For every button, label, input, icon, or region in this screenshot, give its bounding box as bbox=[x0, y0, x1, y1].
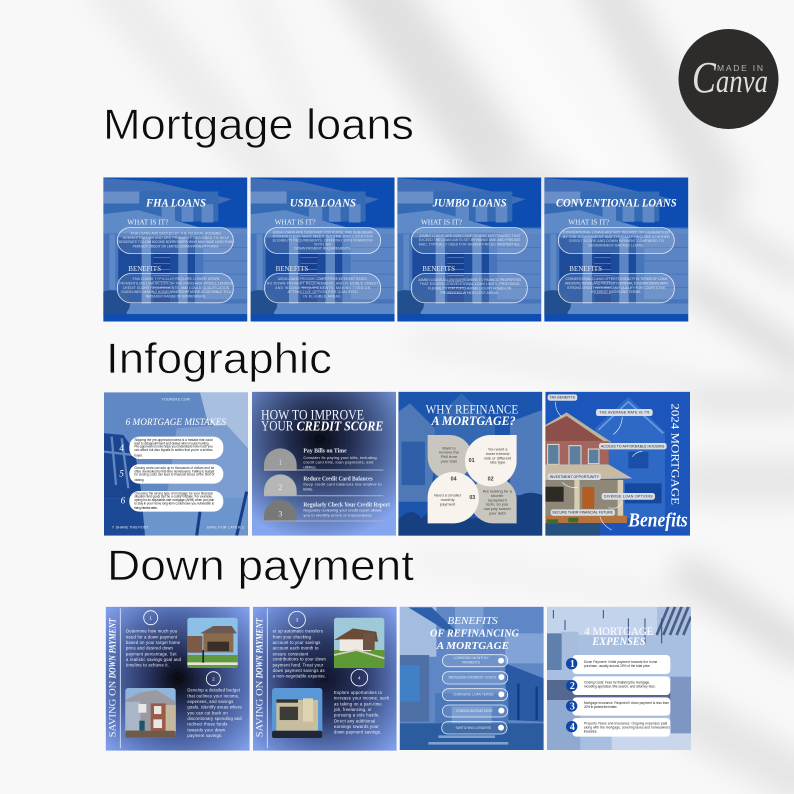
panel: FHA loans: FHA LOANS TYPICALLY REQUIRE LOWER DOWN bbox=[133, 277, 220, 281]
panel: benefits of refinancing a mortgage: REDUCING INTEREST COSTS bbox=[449, 676, 497, 680]
panel: why refinance a mortgage: remove the bbox=[439, 450, 460, 455]
panel: 6 mortgage mistakes: to stay in your home long-term could leave you vulnerable to bbox=[134, 501, 215, 505]
heading: Mortgage loans: Mortgage loans bbox=[103, 101, 414, 149]
panel: 6 mortgage mistakes: 6 bbox=[121, 496, 126, 506]
panel: how to improve your credit score: YOUR bbox=[261, 419, 294, 435]
panel: why refinance a mortgage: your loan bbox=[441, 458, 457, 463]
panel: Jumbo loans: FLEXIBILITY FOR PURCHASING LUXURY HOMES OR bbox=[428, 286, 512, 290]
panel: 6 mortgage mistakes: closing. bbox=[134, 478, 144, 482]
panel: saving on down payment steps 1-2: payment percentage. Set bbox=[126, 651, 177, 656]
panel: 2024 mortgage benefits: DIVERSE LOAN OPTIONS bbox=[604, 495, 653, 499]
panel: Jumbo loans: WHAT IS IT? bbox=[421, 218, 462, 226]
panel: saving on down payment steps 3-4: payment fund. Treat your bbox=[273, 662, 324, 667]
panel: 4 mortgage expenses bbox=[547, 606, 691, 750]
panel: Conventional loans: GOVERNMENT BACKED LOANS. bbox=[588, 244, 645, 248]
panel: how to improve your credit score: limits. bbox=[303, 487, 313, 492]
panel: why refinance a mortgage: PMI from bbox=[441, 454, 458, 459]
panel: Jumbo loans: MAC, TYPICALLY USED FOR HIGHER PRICED PROPERTIES. bbox=[419, 242, 520, 246]
panel: 6 mortgage mistakes: Closing costs can add up to thousands of dollars and be bbox=[134, 466, 215, 470]
panel: saving on down payment steps 3-4: contributions to your down bbox=[273, 657, 326, 662]
panel: 2024 mortgage benefits: SECURE THEIR FINANCIAL FUTURE bbox=[552, 511, 614, 515]
panel: 2024 mortgage benefits: ACCESS TO AFFORDABLE HOUSING bbox=[601, 444, 665, 448]
panel: benefits of refinancing a mortgage bbox=[400, 606, 544, 750]
panel: FHA loans: MODERATE TO LOW INCOME BORROWERS WHO MAY HAVE LESS THAN bbox=[118, 240, 234, 244]
panel: 2024 mortgage benefits: 2024 MORTGAGE bbox=[669, 403, 682, 505]
panel: saving on down payment steps 1-2: need for a down payment bbox=[126, 634, 178, 639]
panel: benefits of refinancing a mortgage: OF REFINANCING bbox=[430, 629, 519, 640]
panel: 4 mortgage expenses: Down Payment: Initial payment towards the home bbox=[584, 660, 658, 664]
panel: Jumbo loans: BENEFITS bbox=[422, 265, 455, 273]
panel: Jumbo loans: JUMBO LOANS ALLOW BORROWERS TO FINANCE PROPERTIES bbox=[418, 278, 522, 282]
panel: how to improve your credit score: CREDIT SCORE bbox=[297, 420, 383, 435]
panel: how to improve your credit score: 3 bbox=[278, 509, 282, 518]
panel: 6 mortgage mistakes: Pre-approval not only helps you understand how much you bbox=[134, 445, 213, 449]
panel: saving on down payment steps 1-2: expenses, and savings bbox=[187, 699, 234, 704]
panel: 4 mortgage expenses: including appraisal, title search, and attorney fees. bbox=[584, 684, 656, 688]
panel: USDA loans: AND INCOME REQUIREMENTS, MAKING THEM AN bbox=[275, 286, 371, 290]
panel: why refinance a mortgage: your debt bbox=[489, 510, 507, 515]
panel: Conventional loans: CONVENTIONAL LOANS OFFER FLEXIBILITY IN TERMS OF LOAN bbox=[565, 277, 668, 281]
panel: Conventional loans: INTEREST RATES AND TERMS. bbox=[591, 290, 641, 294]
panel: 6 mortgage mistakes: for closing costs can lead to financial stress at the time of bbox=[134, 473, 214, 477]
panel: Jumbo loans: JUMBO LOANS ARE NON-CONFORMING MORTGAGES THAT bbox=[419, 234, 521, 238]
panel: saving on down payment steps 1-2: that outlines your income, bbox=[187, 693, 240, 698]
panel: saving on down payment steps 1-2: payment savings. bbox=[187, 733, 223, 738]
panel: USDA loans: NO DOWN PAYMENT REQUIREMENT, AND FLEXIBLE CREDIT bbox=[267, 282, 379, 286]
panel: saving on down payment steps 1-2: timeline to achieve it. bbox=[126, 663, 169, 668]
panel: Conventional loans: CONVENTIONAL LOANS ARE NOT INSURED OR GUARANTEED bbox=[563, 230, 670, 234]
panel: why refinance a mortgage: Need a smaller bbox=[434, 493, 462, 498]
panel: how to improve your credit score: Pay Bills on Time bbox=[303, 448, 347, 454]
panel: why refinance a mortgage bbox=[398, 392, 542, 536]
panel: saving on down payment steps 3-4: Direct any additional bbox=[334, 718, 376, 723]
panel: saving on down payment steps 1-2: you can cut back on bbox=[187, 710, 228, 715]
panel: Conventional loans bbox=[544, 178, 688, 322]
panel: Jumbo loans: EXCEED THE LOAN LIMITS SET BY FANNIE MAE AND FREDDIE bbox=[419, 238, 521, 242]
panel: FHA loans: ADMINISTRATION AND ARE PRIMARILY DESIGNED TO HELP bbox=[123, 236, 230, 240]
panel: why refinance a mortgage: A MORTGAGE? bbox=[431, 414, 516, 428]
panel: FHA loans: GUIDELINES, MAKING HOMEOWNERSHIP MORE ACCESSIBLE TO A bbox=[121, 290, 232, 294]
panel: how to improve your credit score bbox=[252, 392, 396, 536]
panel: 4 mortgage expenses: 20% to protect the lender. bbox=[584, 705, 617, 709]
panel: saving on down payment steps 3-4: account to your savings bbox=[273, 640, 321, 645]
panel: 4 mortgage expenses: 2 bbox=[570, 681, 575, 692]
badge: Made in Canva: MADE IN bbox=[717, 63, 763, 73]
panel: FHA loans: BROADER RANGE OF BORROWERS. bbox=[146, 294, 206, 298]
panel: USDA loans: USDA LOANS PROVIDE COMPETITIVE INTEREST RATES, bbox=[278, 277, 368, 281]
panel: why refinance a mortgage: 01 bbox=[469, 458, 475, 464]
panel: 6 mortgage mistakes: Skipping the pre-approval process is a mistake that could bbox=[134, 438, 213, 442]
panel: benefits of refinancing a mortgage: PAYMENTS bbox=[462, 661, 481, 665]
panel: why refinance a mortgage: rate or different bbox=[484, 455, 512, 460]
panel: benefits of refinancing a mortgage: A MORTGAGE bbox=[436, 641, 509, 652]
panel: USDA loans: IN ELIGIBLE AREAS. bbox=[303, 294, 342, 298]
panel: 2024 mortgage benefits: THE AVERAGE RATE IS 7% bbox=[599, 411, 649, 415]
panel: why refinance a mortgage: You want a bbox=[488, 447, 508, 452]
badge: Made in Canva bbox=[678, 29, 778, 129]
panel: 6 mortgage mistakes: 5 bbox=[119, 469, 124, 479]
panel: FHA loans: PERFECT CREDIT OR LIMITED DOWN PAYMENT FUNDS. bbox=[133, 244, 219, 248]
panel: USDA loans: WHAT IS IT? bbox=[275, 218, 316, 226]
panel: saving on down payment steps 3-4: Explore opportunities to bbox=[334, 690, 383, 695]
panel: saving on down payment steps 3-4: as taking on a part-time bbox=[334, 701, 382, 706]
panel: saving on down payment steps 3-4: et up automatic transfers bbox=[273, 629, 323, 634]
panel: why refinance a mortgage: shorter bbox=[491, 493, 504, 498]
panel: saving on down payment steps 1-2: 2 bbox=[212, 676, 215, 681]
panel: 6 mortgage mistakes: rising interest rates. bbox=[134, 506, 158, 510]
panel: saving on down payment steps 3-4: down payment savings. bbox=[334, 730, 381, 735]
panel: how to improve your credit score: Reduce Credit Card Balances bbox=[303, 477, 373, 483]
panel: how to improve your credit score: utilities. bbox=[303, 464, 317, 469]
panel: 6 mortgage mistakes: YOURSITE.COM bbox=[162, 397, 190, 401]
heading: Infographic: Infographic bbox=[106, 335, 332, 383]
panel: why refinance a mortgage: Are looking for a bbox=[483, 489, 513, 494]
panel: 4 mortgage expenses: Mortgage Insurance: Required if down payment is less than bbox=[584, 701, 669, 705]
panel: saving on down payment steps 3-4: increase your income, such bbox=[334, 696, 390, 701]
panel: saving on down payment steps 3-4: earnings towards your bbox=[334, 724, 379, 729]
panel: saving on down payment steps 1-2: based on your target home bbox=[126, 640, 181, 645]
panel: FHA loans: FHA LOANS ARE BACKED BY THE FEDERAL HOUSING bbox=[131, 232, 221, 236]
panel: Conventional loans: BENEFITS bbox=[569, 265, 602, 273]
panel: why refinance a mortgage: 03 bbox=[469, 495, 475, 501]
heading: Down payment: Down payment bbox=[107, 542, 414, 590]
panel: 6 mortgage mistakes: lead to disappointment and delays when house hunting. bbox=[134, 441, 209, 445]
panel: 6 mortgage mistakes bbox=[104, 392, 248, 536]
panel: 6 mortgage mistakes: 4 bbox=[119, 443, 124, 453]
panel: saving on down payment steps 3-4: SAVING ON bbox=[255, 680, 265, 737]
panel: saving on down payment steps 1-2: Determine how much you bbox=[126, 629, 178, 634]
panel: FHA loans: FHA LOANS bbox=[145, 198, 206, 210]
panel: USDA loans bbox=[250, 178, 395, 322]
panel: 2024 mortgage benefits: TAX BENEFITS bbox=[550, 396, 576, 400]
panel: why refinance a mortgage: payment bbox=[440, 501, 456, 506]
panel: saving on down payment steps 3-4: from your checking bbox=[273, 634, 312, 639]
panel: why refinance a mortgage: Want to bbox=[442, 445, 457, 450]
panel: 4 mortgage expenses: 3 bbox=[570, 701, 575, 712]
panel: why refinance a mortgage: can pay sooner bbox=[484, 506, 512, 511]
panel: 4 mortgage expenses: EXPENSES bbox=[591, 636, 646, 648]
panel: 6 mortgage mistakes: can afford but also signals to sellers that you're a serious bbox=[134, 448, 213, 452]
panel: saving on down payment steps 1-2: towards your down bbox=[187, 727, 226, 732]
panel: saving on down payment steps 3-4: account each month to bbox=[273, 646, 319, 651]
panel: saving on down payment steps 1-2: a realistic savings goal and bbox=[126, 657, 182, 662]
panel: Jumbo loans bbox=[397, 178, 542, 322]
panel: USDA loans: HOMEBUYERS WHO MEET INCOME AND LOCATION bbox=[273, 234, 373, 238]
panel: saving on down payment steps 3-4: job, freelancing, or bbox=[333, 707, 372, 712]
panel: Conventional loans: WHAT IS IT? bbox=[568, 218, 609, 226]
panel: saving on down payment steps 3-4: 3 bbox=[296, 617, 299, 622]
panel: Conventional loans: STRONG CREDIT HISTORIES MAY QUALIFY FOR COMPETITIVE bbox=[567, 286, 666, 290]
panel: benefits of refinancing a mortgage: BENEFITS bbox=[447, 616, 498, 627]
panel: 6 mortgage mistakes: Choosing the wrong type of mortgage for your financial bbox=[134, 491, 213, 495]
panel: saving on down payment steps 3-4: DOWN PAYMENT bbox=[255, 618, 265, 679]
panel: benefits of refinancing a mortgage: CHANGING LOAN TERMS bbox=[453, 693, 494, 697]
panel: saving on down payment steps 1-2: DOWN PAYMENT bbox=[108, 618, 118, 679]
panel: how to improve your credit score: 2 bbox=[278, 483, 282, 492]
panel: 6 mortgage mistakes: buyer. bbox=[134, 453, 143, 457]
panel: how to improve your credit score: Consider fix paying your bills, including bbox=[303, 455, 377, 460]
panel: Conventional loans: CONVENTIONAL LOANS bbox=[556, 198, 677, 210]
panel: USDA loans: USDA LOANS bbox=[290, 198, 356, 210]
panel: USDA loans: DOWN PAYMENT REQUIREMENTS. bbox=[294, 246, 351, 250]
panel: saving on down payment steps 1-2: discretionary spending and bbox=[187, 716, 242, 721]
panel: benefits of refinancing a mortgage: LOWERING MONTHLY bbox=[453, 656, 489, 660]
panel: saving on down payment steps 1-2: price and desired down bbox=[126, 646, 174, 651]
panel: why refinance a mortgage: rate type bbox=[490, 460, 506, 465]
panel: USDA loans: WITH NO bbox=[314, 242, 331, 246]
panel: USDA loans: BENEFITS bbox=[276, 265, 308, 273]
panel: saving on down payment steps 3-4: ensure consistent bbox=[273, 651, 309, 656]
panel: benefits of refinancing a mortgage: SWITCHING LENDERS bbox=[456, 726, 492, 730]
panel: 6 mortgage mistakes: situation and goals can be a costly mistake. For example, bbox=[134, 495, 213, 499]
panel: why refinance a mortgage: 02 bbox=[488, 477, 494, 483]
panel: FHA loans: WHAT IS IT? bbox=[127, 218, 168, 226]
panel: 6 mortgage mistakes: 6 MORTGAGE MISTAKES bbox=[126, 417, 226, 428]
panel: USDA loans: USDA LOANS ARE DESIGNED FOR RURAL AND SUBURBAN bbox=[273, 230, 373, 234]
panel: USDA loans: ATTRACTIVE OPTION FOR QUALIFIED bbox=[288, 290, 358, 294]
panel: why refinance a mortgage: 04 bbox=[451, 477, 457, 483]
panel: 2024 mortgage benefits bbox=[545, 392, 690, 536]
panel: 4 mortgage expenses: Closing Costs: Fees for finalizing the mortgage, bbox=[584, 680, 650, 684]
badge: Made in Canva: Canva bbox=[692, 53, 768, 102]
panel: saving on down payment steps 1-2: goals. Identify areas where bbox=[187, 705, 242, 710]
panel: how to improve your credit score: Keep credit card balances low relative to bbox=[303, 482, 382, 487]
panel: 4 mortgage expenses: insurance. bbox=[584, 730, 597, 734]
panel: how to improve your credit score: credit card bills, loan payments, and bbox=[303, 460, 373, 465]
panel: how to improve your credit score: Regularly reviewing your credit report allows bbox=[303, 508, 382, 513]
panel: FHA loans bbox=[103, 178, 248, 322]
panel: saving on down payment steps 1-2 bbox=[106, 606, 250, 751]
panel: 4 mortgage expenses: 1 bbox=[570, 659, 575, 670]
panel: 6 mortgage mistakes: SAVE FOR LATER ▯ bbox=[207, 526, 244, 530]
panel: how to improve your credit score: 1 bbox=[278, 458, 282, 467]
panel: 6 mortgage mistakes: often overlooked by first-time homebuyers. Failing to budget bbox=[134, 469, 214, 473]
panel: saving on down payment steps 3-4: down payment savings as bbox=[273, 668, 325, 673]
panel: why refinance a mortgage: WHY REFINANCE bbox=[426, 402, 519, 416]
panel: Jumbo loans: PROPERTIES IN HIGH-COST AREAS. bbox=[440, 291, 499, 295]
panel: why refinance a mortgage: lower interest bbox=[486, 451, 510, 456]
panel: saving on down payment steps 1-2: SAVING ON bbox=[108, 680, 118, 737]
panel: FHA loans: BENEFITS bbox=[128, 265, 161, 273]
panel: saving on down payment steps 1-2: 1 bbox=[149, 615, 152, 620]
panel: 6 mortgage mistakes: ⇑ SHARE THIS POST bbox=[112, 526, 149, 530]
panel: how to improve your credit score: HOW TO IMPROVE bbox=[261, 407, 364, 423]
panel: why refinance a mortgage: repayment bbox=[488, 497, 508, 502]
panel: 4 mortgage expenses: 4 bbox=[570, 722, 575, 733]
panel: why refinance a mortgage: term, so you bbox=[486, 502, 508, 507]
panel: saving on down payment steps 1-2: redirect those funds bbox=[187, 722, 228, 727]
panel: saving on down payment steps 3-4: 4 bbox=[358, 675, 361, 680]
panel: saving on down payment steps 1-2: Develop a detailed budget bbox=[187, 688, 241, 693]
panel: saving on down payment steps 3-4: a non-negotiable expense. bbox=[273, 674, 326, 679]
panel: Conventional loans: AMOUNTS, TERMS, AND PROPERTY CRITERIA, TO BORROWERS WITH bbox=[565, 282, 668, 286]
panel: FHA loans: CREDIT SCORE REQUIREMENTS, AND COULD QUALIFICATION bbox=[123, 286, 230, 290]
panel: 4 mortgage expenses: Property Taxes and Insurance: Ongoing expenses paid bbox=[584, 722, 668, 726]
panel: USDA loans: ELIGIBILITY REQUIREMENTS, OFFERING 100% FINANCING bbox=[273, 238, 373, 242]
panel: saving on down payment steps 3-4: pursuing a side hustle. bbox=[334, 713, 380, 718]
panel: how to improve your credit score: you to identify errors or inaccuracies bbox=[303, 513, 372, 518]
panel: 4 mortgage expenses: along with the mortgage, covering taxes and homeowners bbox=[584, 726, 670, 730]
panel: why refinance a mortgage: monthly bbox=[441, 497, 455, 502]
panel: benefits of refinancing a mortgage: CONSOLIDATING DEBT bbox=[456, 709, 493, 713]
panel: how to improve your credit score: Regularly Check Your Credit Report bbox=[303, 502, 390, 508]
panel: Conventional loans: BY THE GOVERNMENT AND TYPICALLY REQUIRE A HIGHER bbox=[563, 235, 670, 239]
panel: FHA loans: PAYMENTS (AS LOW AS 3.5% OF THE PURCHASE PRICE), LENIENT bbox=[119, 282, 233, 286]
panel: 2024 mortgage benefits: INVESTMENT OPPORTUNITY bbox=[550, 475, 600, 479]
panel: 4 mortgage expenses: 4 MORTGAGE bbox=[584, 626, 653, 638]
panel: Jumbo loans: JUMBO LOANS bbox=[432, 198, 507, 210]
panel: 6 mortgage mistakes: opting for an adjustable-rate mortgage (ARM) when you plan bbox=[134, 498, 215, 502]
panel: 4 mortgage expenses: purchase, usually around 20% of the total price. bbox=[584, 664, 651, 668]
panel: Jumbo loans: THAT EXCEED CONVENTIONAL LOAN LIMITS, PROVIDING bbox=[420, 282, 520, 286]
panel: Conventional loans: CREDIT SCORE AND DOWN PAYMENT COMPARED TO bbox=[569, 239, 664, 243]
panel: saving on down payment steps 3-4 bbox=[253, 606, 397, 751]
